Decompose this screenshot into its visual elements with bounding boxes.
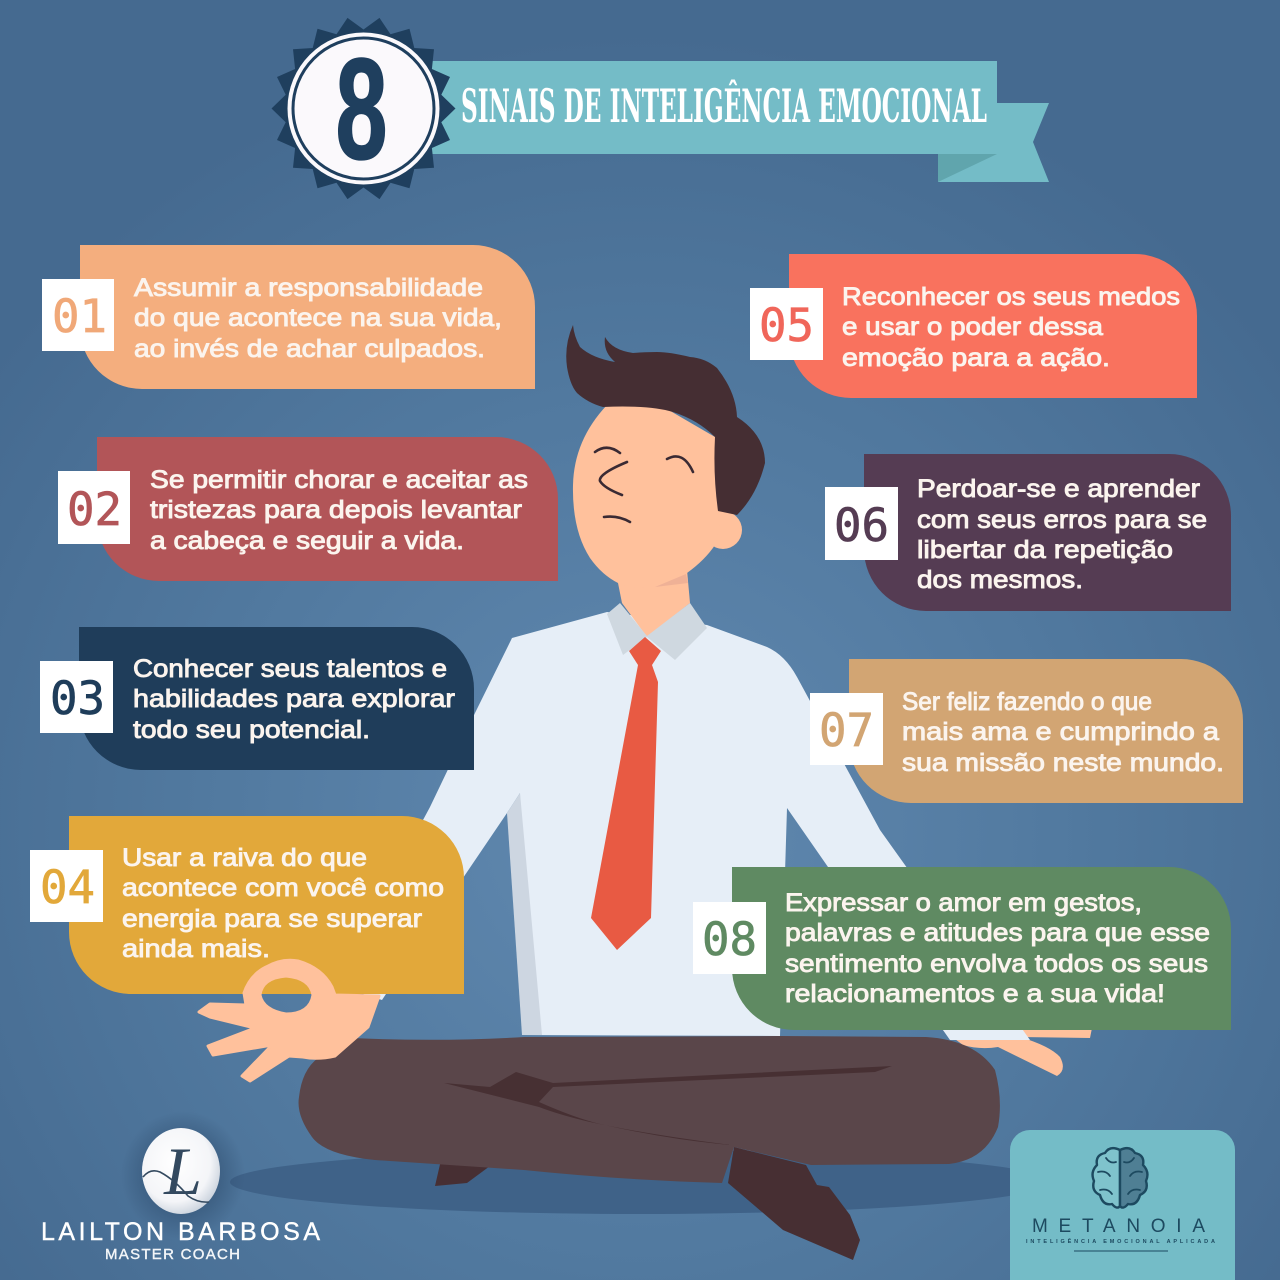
logo: Metanoia — [1010, 1130, 1235, 1280]
logo subtitle: MASTER COACH — [105, 1246, 240, 1263]
number box 02 — [58, 471, 130, 544]
card 02 — [58, 437, 558, 581]
text 03: todo seu potencial. — [133, 716, 370, 744]
text 01 — [134, 274, 502, 363]
man figure — [299, 325, 1092, 1260]
text 06: libertar da repetição — [917, 536, 1173, 564]
text 04 — [122, 844, 444, 963]
number box 04 — [30, 850, 103, 922]
brand name: METANOIA — [1032, 1216, 1205, 1237]
card 03 — [40, 627, 474, 770]
number box 02: 02 — [67, 483, 122, 536]
tie — [591, 637, 661, 950]
title banner — [272, 18, 1049, 199]
text 05: e usar o poder dessa — [842, 313, 1103, 341]
card 04 — [30, 816, 464, 994]
text 07: Ser feliz fazendo o que — [902, 688, 1152, 716]
card 07 — [810, 659, 1243, 803]
brand tagline: INTELIGÊNCIA EMOCIONAL APLICADA — [1026, 1237, 1215, 1245]
number box 03 — [40, 661, 113, 733]
ribbon tail — [938, 103, 1049, 182]
badge circle — [288, 32, 440, 184]
text 06 — [917, 475, 1207, 594]
card 05 — [750, 254, 1197, 398]
starburst badge — [272, 18, 456, 199]
text 04: ainda mais. — [122, 935, 270, 963]
ribbon main — [425, 61, 997, 154]
number box 08 — [693, 902, 766, 974]
text 02 — [150, 466, 528, 555]
text 02: a cabeça e seguir a vida. — [150, 527, 464, 555]
face details — [595, 448, 693, 522]
hair — [566, 325, 765, 515]
right shoe — [728, 1147, 860, 1260]
logo panel — [1010, 1130, 1235, 1280]
number box 03: 03 — [50, 672, 105, 725]
logo ball — [142, 1128, 220, 1214]
card 08 — [693, 867, 1231, 1030]
logo: Lailton Barbosa — [41, 1111, 320, 1263]
text 01: ao invés de achar culpados. — [134, 335, 485, 363]
logo glow — [121, 1111, 245, 1239]
text 04: Usar a raiva do que — [122, 844, 367, 872]
text 02: tristezas para depois levantar — [150, 496, 522, 524]
text 02: Se permitir chorar e aceitar as — [150, 466, 528, 494]
number box 01 — [42, 279, 114, 351]
pants — [299, 1036, 1000, 1183]
text 03: habilidades para explorar — [133, 685, 455, 713]
shirt — [350, 612, 1030, 1040]
number box 04: 04 — [40, 861, 95, 914]
number box 07 — [810, 693, 883, 765]
neck shadow — [655, 574, 688, 587]
face — [573, 405, 722, 588]
text 05: emoção para a ação. — [842, 344, 1110, 372]
ribbon fold — [938, 154, 997, 182]
text 08 — [785, 889, 1210, 1008]
number box 05: 05 — [759, 299, 814, 352]
text 08: Expressar o amor em gestos, — [785, 889, 1142, 917]
pants creases — [444, 1066, 892, 1145]
big number 8: 8 — [336, 28, 388, 190]
text 06: com seus erros para se — [917, 506, 1207, 534]
logo name: LAILTON BARBOSA — [41, 1218, 320, 1246]
shirt shadow — [507, 793, 542, 1035]
text 01: Assumir a responsabilidade — [134, 274, 483, 302]
text 08: sentimento envolva todos os seus — [785, 950, 1208, 978]
number box 01: 01 — [52, 290, 107, 343]
icon: brain — [1093, 1148, 1147, 1208]
text 03: Conhecer seus talentos e — [133, 655, 447, 683]
ear — [704, 511, 742, 549]
collar — [607, 603, 707, 660]
text 07 — [902, 688, 1224, 777]
text 06: dos mesmos. — [917, 566, 1083, 594]
neck and face — [573, 405, 742, 637]
number box 08: 08 — [702, 913, 757, 966]
card 01 — [42, 245, 535, 389]
text 03 — [133, 655, 455, 744]
text 05 — [842, 283, 1180, 372]
left hand — [199, 960, 379, 1081]
text 07: mais ama e cumprindo a — [902, 718, 1219, 746]
text 01: do que acontece na sua vida, — [134, 304, 502, 332]
number box 06: 06 — [834, 499, 889, 552]
number box 05 — [750, 288, 823, 360]
text 04: acontece com você como — [122, 874, 444, 902]
number box 07: 07 — [819, 704, 874, 757]
text 08: relacionamentos e a sua vida! — [785, 980, 1165, 1008]
right hand — [940, 1028, 1092, 1076]
text 06: Perdoar-se e aprender — [917, 475, 1200, 503]
card 06 — [825, 454, 1231, 611]
floor shadow — [230, 1150, 1050, 1214]
text 08: palavras e atitudes para que esse — [785, 919, 1210, 947]
left shoe — [435, 1160, 490, 1186]
text 05: Reconhecer os seus medos — [842, 283, 1180, 311]
number box 06 — [825, 487, 898, 560]
text 04: energia para se superar — [122, 905, 422, 933]
monogram flourish — [143, 1171, 209, 1202]
logo monogram: L — [163, 1133, 202, 1209]
text 07: sua missão neste mundo. — [902, 749, 1224, 777]
